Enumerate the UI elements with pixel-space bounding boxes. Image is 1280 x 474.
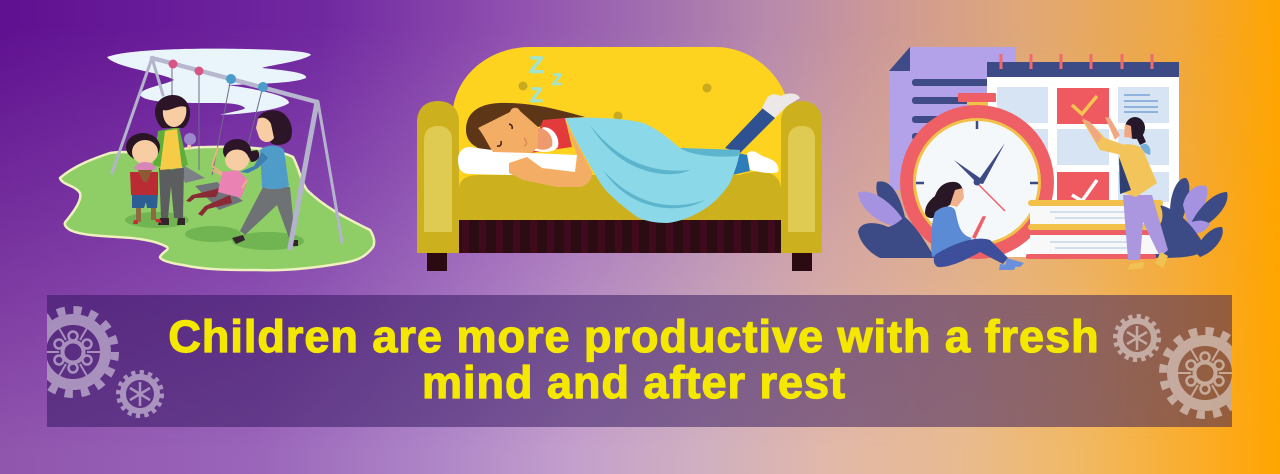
swing hooks (168, 60, 268, 92)
check marks (1072, 96, 1097, 201)
dad (232, 110, 298, 246)
title (168, 311, 1100, 408)
closed eyes (497, 124, 526, 146)
mom (153, 95, 196, 225)
sleeping letters Z: Z (529, 52, 544, 79)
shirt (530, 118, 572, 153)
leaves left (858, 181, 935, 258)
face and neck (478, 108, 558, 153)
sofa arms (417, 101, 822, 253)
leaves right (1140, 178, 1228, 258)
sitting woman with laptop (925, 182, 1024, 270)
boy (126, 133, 162, 224)
illustration: family at the swing set (60, 49, 374, 270)
swing top bar and front leg (152, 58, 317, 248)
clock hands (954, 143, 1005, 184)
sleeping letters Z (529, 52, 562, 107)
sofa base (459, 218, 781, 253)
gear: left large (31, 310, 115, 394)
gear: left small (118, 372, 162, 416)
swing seat back (182, 165, 205, 183)
title: mind and after rest (422, 357, 846, 408)
sleeping letters Z: Z (530, 84, 543, 107)
gears (31, 310, 1247, 416)
hair (466, 103, 585, 152)
grass (60, 147, 374, 270)
clock ticks (916, 121, 1038, 183)
document (889, 47, 1016, 190)
leg and socks (725, 94, 800, 175)
calendar (987, 62, 1179, 257)
blanket (565, 118, 740, 223)
illustration: clock, calendar and books (858, 47, 1228, 270)
standing woman (1082, 117, 1168, 270)
title: Children are more productive with a fresh (168, 311, 1100, 362)
stopwatch (900, 93, 1054, 259)
gear: right small (1116, 316, 1158, 360)
cloud (107, 49, 311, 115)
caption band (47, 295, 1232, 427)
sofa seat (459, 172, 781, 220)
girl (186, 139, 259, 216)
blanket folds (590, 125, 740, 208)
books (1026, 200, 1163, 259)
sofa back (452, 47, 790, 220)
document lines (912, 79, 992, 140)
shadows on grass (125, 212, 304, 250)
arm and hand (509, 120, 592, 187)
calendar cells (997, 87, 1169, 202)
calendar rings (1001, 54, 1152, 69)
ropes (172, 68, 262, 175)
gear: right large (1163, 331, 1247, 415)
sofa feet (427, 253, 812, 271)
sleeping letters Z: Z (552, 70, 562, 89)
illustration: girl sleeping on a sofa (417, 47, 822, 271)
sofa arm panels (424, 126, 815, 232)
sofa buttons (518, 82, 712, 120)
swing set back legs (112, 58, 342, 242)
pillow (458, 147, 577, 175)
swing seat (195, 182, 243, 210)
